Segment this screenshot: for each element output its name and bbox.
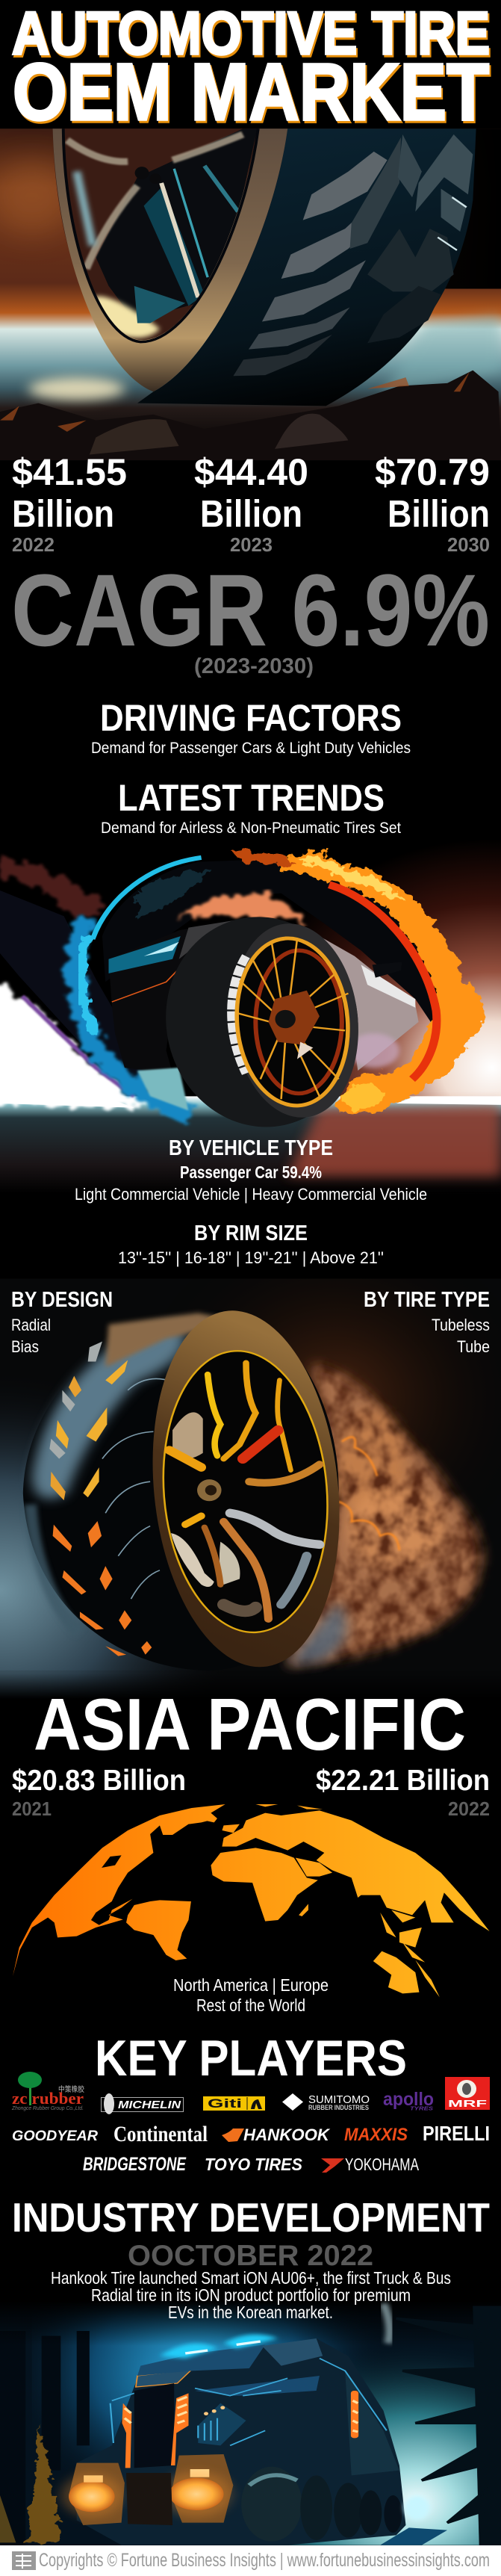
by rim size xyxy=(118,1222,384,1267)
logo: ZC Rubber xyxy=(11,2072,84,2111)
footer xyxy=(0,2545,501,2576)
logo: Michelin xyxy=(102,2093,184,2114)
logo: Sumitomo Rubber Industries: SUMITOMO xyxy=(308,2093,370,2106)
by design: Bias xyxy=(11,1337,39,1356)
by tire type: Tube xyxy=(457,1337,490,1356)
by design: BY DESIGN xyxy=(11,1288,113,1312)
logo: Yokohama xyxy=(321,2155,419,2174)
stat: 2023: Billion xyxy=(200,492,302,535)
logo: Maxxis: MAXXIS xyxy=(344,2125,408,2145)
latest trends: Demand for Airless & Non-Pneumatic Tires Set xyxy=(101,820,401,837)
driving factors: DRIVING FACTORS xyxy=(100,697,402,739)
by vehicle type: Light Commercial Vehicle | Heavy Commercial Vehicle xyxy=(75,1185,427,1204)
october 2022 development xyxy=(51,2240,451,2322)
logo: Goodyear: GOODYEAR xyxy=(12,2128,98,2144)
by rim size: 13''-15'' | 16-18'' | 19''-21'' | Above 21'' xyxy=(118,1248,384,1267)
by tire type: Tubeless xyxy=(432,1316,490,1334)
stat: 2023: $44.40 xyxy=(194,451,308,493)
logo: Bridgestone: BRIDGESTONE xyxy=(83,2154,187,2175)
regional values: $20.83 Billion xyxy=(12,1765,186,1797)
title xyxy=(12,0,491,139)
logo: Giti: Giti xyxy=(208,2096,242,2111)
logo: Apollo Tyres: TYRES xyxy=(410,2107,433,2111)
stat: 2022 xyxy=(12,451,127,556)
other regions: Rest of the World xyxy=(196,1996,305,2015)
latest trends: LATEST TRENDS xyxy=(118,777,385,819)
stat: 2030: $70.79 xyxy=(375,451,490,493)
key player logos xyxy=(11,2072,490,2175)
logo: ZC Rubber: 中策橡胶 xyxy=(58,2084,84,2094)
logo: Pirelli: PIRELLI xyxy=(423,2122,490,2145)
stat: 2022: $41.55 xyxy=(12,451,127,493)
logo: Yokohama: YOKOHAMA xyxy=(345,2155,419,2174)
by rim size: BY RIM SIZE xyxy=(194,1222,308,1245)
logo: Toyo Tires: TOYO TIRES xyxy=(205,2155,303,2174)
photo: tire with rising smoke xyxy=(0,1278,501,1702)
market value stats xyxy=(12,451,490,556)
stat: 2023 xyxy=(194,451,308,556)
by design: Radial xyxy=(11,1316,51,1334)
by design xyxy=(11,1288,113,1356)
logo: ZC Rubber: Zhongce Rubber Group Co.,Ltd. xyxy=(11,2106,84,2111)
regional values: 2021 xyxy=(12,1798,52,1820)
logo: MRF xyxy=(445,2077,490,2110)
logo: Michelin: MICHELIN xyxy=(118,2099,181,2111)
driving factors: Demand for Passenger Cars & Light Duty Vehicles xyxy=(91,740,411,757)
stat: 2022: 2022 xyxy=(12,533,55,556)
regional values: 2022 xyxy=(448,1798,490,1820)
CAGR: (2023-2030) xyxy=(194,654,314,678)
regional values xyxy=(12,1765,490,1820)
world map xyxy=(13,1804,490,1997)
logo: ZC Rubber: zc rubber xyxy=(12,2089,84,2108)
latest trends xyxy=(101,777,401,837)
stat: 2030 xyxy=(375,451,490,556)
stat: 2030: 2030 xyxy=(447,533,490,556)
logo: Sumitomo Rubber Industries: RUBBER INDUSTRIES xyxy=(308,2104,369,2111)
other regions: North America | Europe xyxy=(173,1975,329,1995)
stat: 2022: Billion xyxy=(12,492,114,535)
by tire type xyxy=(364,1288,490,1356)
october 2022 development: OOCTOBER 2022 xyxy=(128,2240,373,2272)
stat: 2030: Billion xyxy=(388,492,490,535)
logo: Sumitomo Rubber Industries xyxy=(282,2093,370,2111)
heading: key players: KEY PLAYERS xyxy=(95,2030,407,2087)
logo: Continental: Continental xyxy=(113,2122,208,2146)
photo: futuristic truck in forest xyxy=(0,2299,501,2545)
logo: Giti xyxy=(203,2096,265,2111)
logo: MRF: MRF xyxy=(448,2098,487,2109)
october 2022 development: EVs in the Korean market. xyxy=(168,2303,333,2322)
logo: Hankook: HANKOOK xyxy=(243,2125,331,2144)
photo: sports car wheel with coloured smoke xyxy=(0,839,501,1194)
regional values: $22.21 Billion xyxy=(316,1765,490,1797)
icon: Fortune Business Insights logo xyxy=(12,2551,36,2570)
stat: 2023: 2023 xyxy=(230,533,273,556)
photo: tire close-up xyxy=(0,129,501,460)
heading: Asia Pacific: ASIA PACIFIC xyxy=(34,1683,466,1765)
driving factors xyxy=(91,697,411,757)
by vehicle type: Passenger Car 59.4% xyxy=(180,1162,322,1182)
other regions xyxy=(173,1975,329,2015)
logo: Apollo Tyres: apollo xyxy=(383,2089,434,2110)
by vehicle type: BY VEHICLE TYPE xyxy=(169,1136,333,1160)
october 2022 development: Radial tire in its iON product portfolio for premium xyxy=(91,2285,411,2305)
by vehicle type xyxy=(75,1136,427,1204)
